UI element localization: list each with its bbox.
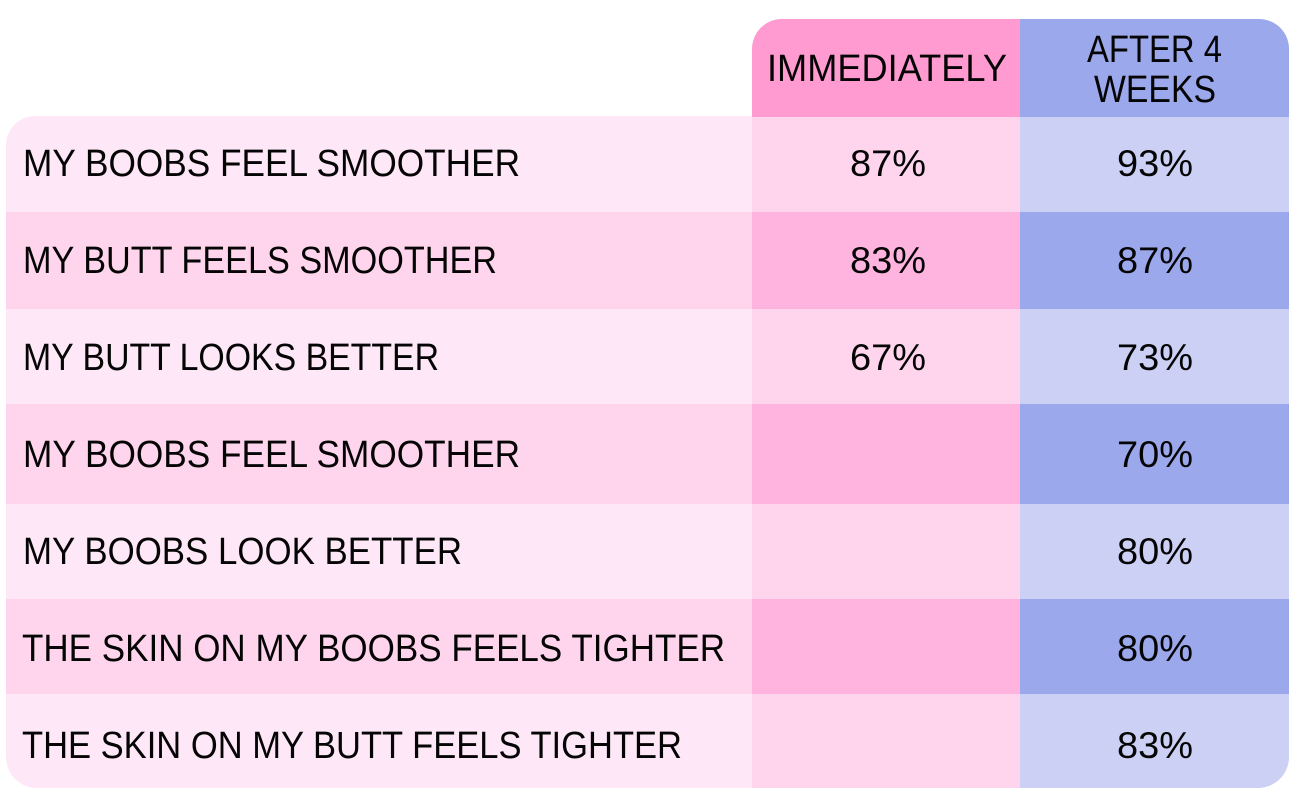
row 2: 83%: [850, 240, 926, 281]
row 7: [0, 694, 1289, 788]
row 4: [0, 404, 1289, 504]
row 3: [0, 309, 1289, 404]
row 3: 67%: [850, 337, 926, 378]
row 5: 80%: [1117, 531, 1193, 572]
row 5: MY BOOBS LOOK BETTER: [23, 531, 462, 573]
row 2: 87%: [1117, 240, 1193, 281]
row 4: 70%: [1117, 434, 1193, 475]
row 1: 87%: [850, 143, 926, 184]
row 1: [0, 116, 1289, 212]
row 7: 83%: [1117, 725, 1193, 766]
row 1: 93%: [1117, 143, 1193, 184]
row 7: THE SKIN ON MY BUTT FEELS TIGHTER: [22, 725, 682, 767]
header: immediately: [752, 19, 1020, 117]
row 1: MY BOOBS FEEL SMOOTHER: [23, 143, 520, 185]
row 2: MY BUTT FEELS SMOOTHER: [23, 240, 497, 282]
header: after 4 weeks: WEEKS: [1094, 69, 1216, 111]
row 3: 73%: [1117, 337, 1193, 378]
row 4: MY BOOBS FEEL SMOOTHER: [23, 434, 520, 476]
header: after 4 weeks: [1020, 19, 1289, 117]
row 2: [0, 212, 1289, 309]
row 6: THE SKIN ON MY BOOBS FEELS TIGHTER: [22, 628, 725, 670]
row 5: [0, 504, 1289, 599]
row 6: 80%: [1117, 628, 1193, 669]
header: immediately: IMMEDIATELY: [767, 48, 1007, 90]
row 3: MY BUTT LOOKS BETTER: [23, 337, 439, 379]
row 6: [0, 599, 1289, 694]
header: after 4 weeks: AFTER 4: [1087, 29, 1222, 71]
